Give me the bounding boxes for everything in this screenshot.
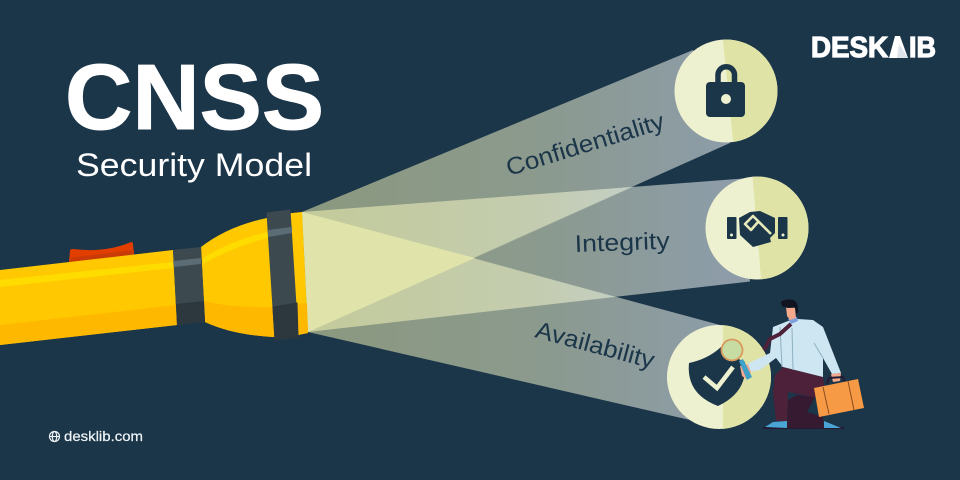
flashlight head [201, 212, 308, 337]
shirt [745, 319, 841, 377]
icon: padlock [706, 67, 745, 117]
icon: globe [50, 432, 60, 442]
flashlight ring 1 [173, 247, 205, 325]
shoes [765, 421, 841, 428]
flashlight body [0, 250, 177, 345]
circle: confidentiality lock [674, 40, 778, 142]
logo: Desklib: IB [909, 32, 936, 64]
logo: Desklib: L [893, 41, 904, 61]
back leg [787, 395, 824, 428]
beam: availability [302, 212, 720, 426]
beam: confidentiality [302, 50, 730, 332]
shirt detail lines [780, 327, 823, 370]
magnifier [722, 340, 752, 380]
label: Availability: Availability [532, 317, 657, 374]
briefcase [814, 377, 864, 417]
beam overlap: upper [302, 187, 633, 258]
beam overlap: lower [308, 258, 615, 332]
label: Integrity: Integrity [574, 228, 670, 258]
hand on case [831, 373, 841, 382]
hair [781, 299, 798, 314]
label: Confidentiality: Confidentiality [503, 108, 668, 182]
person with magnifier and briefcase [722, 299, 864, 429]
circle: availability shield [667, 325, 771, 429]
front leg and pants [773, 367, 825, 421]
logo: Desklib [811, 32, 936, 64]
beam: integrity [302, 178, 750, 332]
hand gripping magnifier [740, 364, 751, 379]
switch [69, 242, 134, 264]
flashlight [0, 210, 308, 345]
ground shadow [763, 427, 844, 429]
flashlight ring 2 [267, 210, 298, 340]
circle: integrity handshake [706, 176, 808, 280]
title: CNSS: CNSS [65, 45, 324, 149]
icon: shield with check [689, 347, 745, 406]
tie [764, 324, 791, 350]
icon: handshake [727, 211, 788, 247]
website: desklib.com: desklib.com [64, 428, 143, 444]
face [786, 307, 796, 320]
subtitle: Security Model: Security Model [76, 147, 312, 183]
logo: Desklib: DESK [811, 32, 888, 64]
beam core overlap [302, 212, 475, 332]
collar [788, 317, 798, 324]
